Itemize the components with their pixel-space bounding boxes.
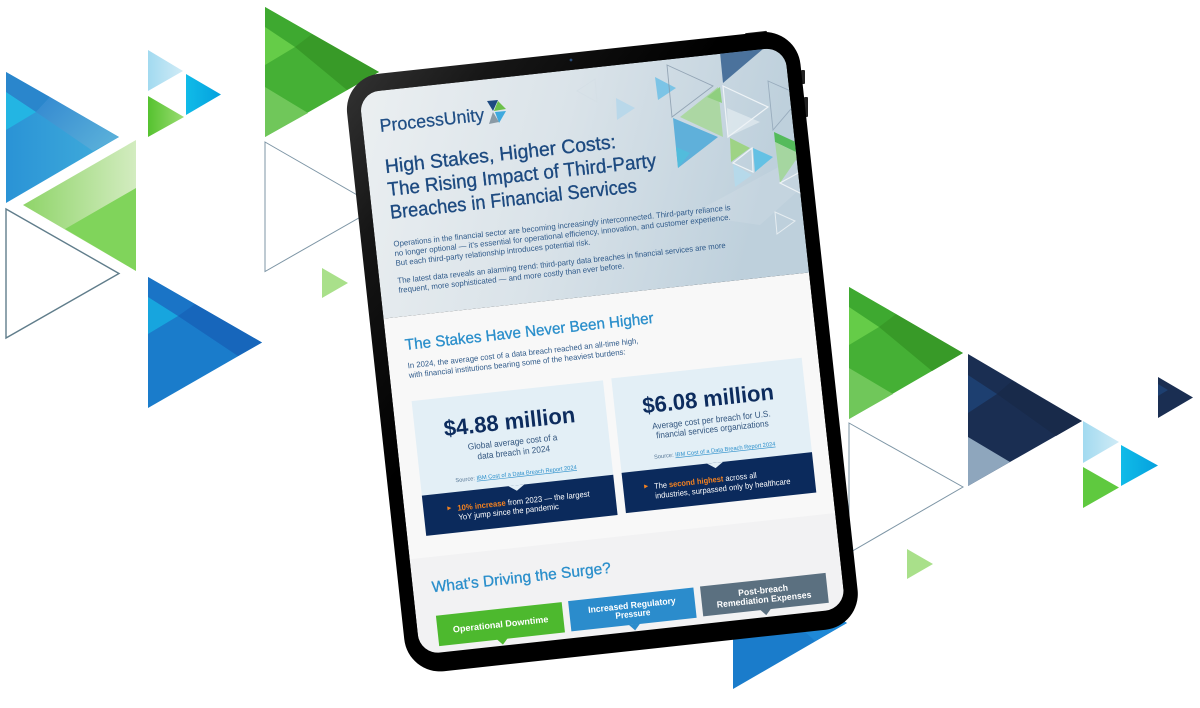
tablet xyxy=(343,28,861,675)
box: remediation expenses: Post-breach xyxy=(738,583,788,598)
stakes intro text: with financial institutions bearing some of the heaviest burdens: xyxy=(407,347,626,380)
screen xyxy=(359,47,846,659)
triangle: green composite right xyxy=(849,287,963,419)
triangle: outline left xyxy=(6,209,119,338)
callout text: The second highest across all xyxy=(654,471,757,491)
title: High Stakes, Higher Costs: xyxy=(384,131,617,178)
box: operational downtime: Operational Downtime xyxy=(452,614,549,634)
logo: ProcessUnity xyxy=(380,100,506,132)
section: stakes background xyxy=(384,272,835,560)
heading: stakes: The Stakes Have Never Been Higher xyxy=(404,310,654,354)
background triangles: left cluster xyxy=(6,7,379,408)
title xyxy=(386,137,656,219)
triangle: small light green xyxy=(322,268,348,298)
intro paragraph: frequent, more sophisticated — and more costly than ever before. xyxy=(398,261,625,295)
triangle: blue composite bottom xyxy=(733,558,847,689)
source: Source: IBM Cost of a Data Breach Report 2024 xyxy=(654,442,776,461)
box: regulatory pressure xyxy=(568,588,697,632)
triangle: green composite top xyxy=(265,7,379,137)
tablet bezel xyxy=(343,28,861,675)
camera xyxy=(570,59,572,61)
triangle: blue composite left xyxy=(6,72,119,203)
panel: card 6.08 million xyxy=(611,358,816,513)
caption: Global average cost of a xyxy=(467,432,558,452)
callout text: industries, surpassed only by healthcare xyxy=(655,477,791,501)
stat: $6.08 million xyxy=(641,379,775,418)
triangle: outline right xyxy=(849,423,963,553)
logo: ProcessUnity: ProcessUnity xyxy=(379,105,485,136)
section: drivers background xyxy=(410,513,846,659)
callout text: YoY jump since the pandemic xyxy=(458,502,559,522)
intro paragraph: The latest data reveals an alarming trend: third-party data breaches in financial services are more xyxy=(397,241,727,285)
logo mark xyxy=(487,100,506,124)
triangle: small light green right xyxy=(907,549,933,579)
caption: Average cost per breach for U.S. xyxy=(652,408,771,431)
callout text: 10% increase from 2023 — the largest xyxy=(457,489,591,513)
header decorative triangles xyxy=(616,49,800,235)
title: The Rising Impact of Third-Party xyxy=(386,150,657,201)
box: remediation expenses: Remediation Expenses xyxy=(716,590,812,610)
triangle: small green xyxy=(148,96,184,137)
triangle: navy composite xyxy=(968,354,1082,486)
callout text xyxy=(644,472,790,498)
header background xyxy=(359,47,809,319)
heading: drivers: What’s Driving the Surge? xyxy=(431,560,612,596)
callout text xyxy=(447,491,590,520)
triangle: small navy xyxy=(1158,377,1193,418)
intro paragraph xyxy=(393,203,736,295)
triangle: outline middle xyxy=(265,142,378,272)
box: regulatory pressure: Increased Regulatory xyxy=(588,595,676,615)
title: Breaches in Financial Services xyxy=(389,175,638,224)
triangle: small green right xyxy=(1083,467,1119,508)
notch xyxy=(508,484,524,491)
intro paragraph: no longer optional — it’s essential for operational efficiency, innovation, and customer experience. xyxy=(394,213,731,258)
panel: card 4.88 million xyxy=(412,380,618,536)
intro paragraph: Operations in the financial sector are becoming increasingly interconnected. Third-party reliance is xyxy=(393,203,731,249)
stakes intro text: In 2024, the average cost of a data breach reached an all-time high, xyxy=(407,336,639,370)
triangle: small cyan xyxy=(186,74,221,115)
triangle: small pale blue xyxy=(148,50,183,91)
caption: financial services organizations xyxy=(656,418,770,440)
caption xyxy=(652,410,770,438)
source: Source: IBM Cost of a Data Breach Report 2024 xyxy=(455,465,578,484)
triangle: pale green pointing left xyxy=(23,140,136,271)
tablet side buttons xyxy=(745,31,808,117)
notch xyxy=(707,462,724,469)
box: remediation expenses xyxy=(700,572,829,616)
box: regulatory pressure: Pressure xyxy=(615,607,651,621)
caption: data breach in 2024 xyxy=(477,443,551,461)
caption xyxy=(468,434,558,460)
triangle: small cyan right xyxy=(1121,445,1158,486)
background triangles: right cluster xyxy=(733,287,1193,689)
triangle: blue composite lower xyxy=(148,277,262,408)
intro paragraph: But each third-party relationship introduces potential risk. xyxy=(395,238,591,268)
stat: $4.88 million xyxy=(442,402,576,441)
triangle: small pale blue right xyxy=(1083,421,1119,463)
box: operational downtime xyxy=(436,602,565,646)
